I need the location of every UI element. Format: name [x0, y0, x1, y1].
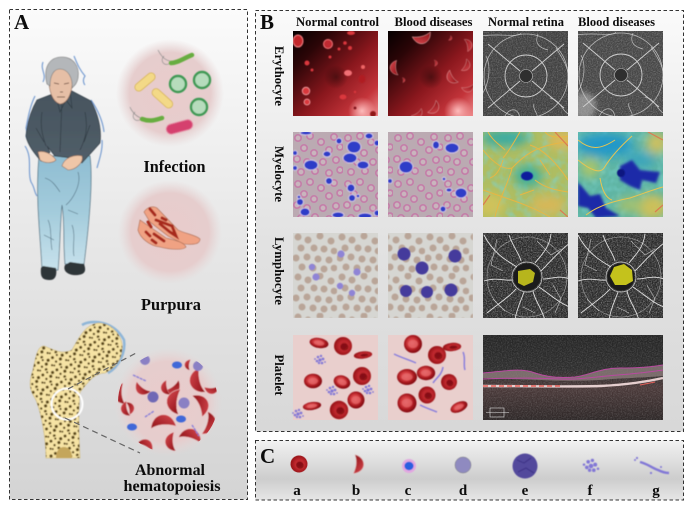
- label: Abnormal hematopoiesis: hematopoiesis: [124, 478, 220, 495]
- icon f: normal platelets: [583, 459, 599, 472]
- row labels: Lymphocyte: [272, 237, 287, 305]
- image: retina heat map blood diseases: [577, 132, 668, 220]
- icon b: sickle cell: [352, 455, 365, 475]
- panel A: clinical manifestations: [10, 10, 248, 500]
- image: myelocyte blood diseases: [388, 132, 473, 217]
- icon g: abnormal platelet: [634, 457, 669, 474]
- row labels: Platelet: [272, 354, 287, 396]
- column headings: [296, 14, 655, 29]
- row labels: [272, 46, 287, 396]
- row labels: Erythocyte: [272, 46, 287, 106]
- icon d: normal lymphocyte: [455, 457, 471, 473]
- illustration: abnormal bone marrow circle: [118, 356, 217, 452]
- icon e: abnormal lymphocyte: [512, 454, 538, 478]
- image: lymphocyte normal control: [293, 233, 378, 318]
- image: retina deep layer blood diseases: [578, 233, 664, 320]
- legend letters: [293, 483, 660, 499]
- heading: panel letter C: C: [260, 444, 275, 468]
- label: Purpura: Purpura: [141, 295, 201, 314]
- icon: infection bacteria circle: [116, 39, 224, 147]
- icon c: myelocyte: [402, 459, 416, 473]
- label: Infection: Infection: [144, 157, 206, 176]
- image: platelet blood diseases: [388, 335, 473, 420]
- legend letters: f: [588, 483, 594, 499]
- row labels: Myelocyte: [272, 146, 287, 202]
- column headings: Blood diseases: [394, 14, 472, 29]
- legend letters: a: [293, 483, 301, 499]
- legend letters: e: [522, 483, 529, 499]
- image: retina angiogram blood diseases: [578, 31, 663, 116]
- dashed zoom lines: [65, 352, 140, 453]
- image: erythrocyte blood diseases: [388, 31, 473, 116]
- image: erythrocyte normal control: [293, 31, 378, 125]
- icon a: red blood cell: [288, 453, 310, 475]
- image: platelet normal control: [292, 335, 378, 420]
- heading: panel letter A: A: [14, 10, 30, 34]
- image: lymphocyte blood diseases: [388, 233, 473, 318]
- image: myelocyte normal control: [292, 131, 380, 219]
- legend letters: g: [652, 483, 660, 499]
- panel C: cell legend: [256, 440, 684, 500]
- heading: panel letter B: B: [260, 10, 274, 34]
- column headings: Blood diseases: [578, 14, 655, 29]
- legend letters: d: [459, 483, 468, 499]
- illustration: femur bone with marrow: [30, 322, 124, 458]
- legend letters: c: [405, 483, 412, 499]
- legend letters: b: [352, 483, 360, 499]
- icon: elderly patient with tremor: [25, 56, 104, 280]
- column headings: Normal retina: [488, 14, 564, 29]
- column headings: Normal control: [296, 14, 379, 29]
- panel B: blood cells and retina images: [256, 10, 684, 432]
- label: Abnormal hematopoiesis: Abnormal: [135, 462, 206, 479]
- image: retina heat map normal: [483, 132, 568, 217]
- image: retina deep layer normal: [483, 233, 570, 320]
- image: retina angiogram normal: [481, 31, 568, 119]
- image: OCT cross-section: [483, 335, 663, 420]
- icon: OCT scan bracket: [486, 408, 509, 417]
- icon: purpura legs circle: [118, 180, 222, 284]
